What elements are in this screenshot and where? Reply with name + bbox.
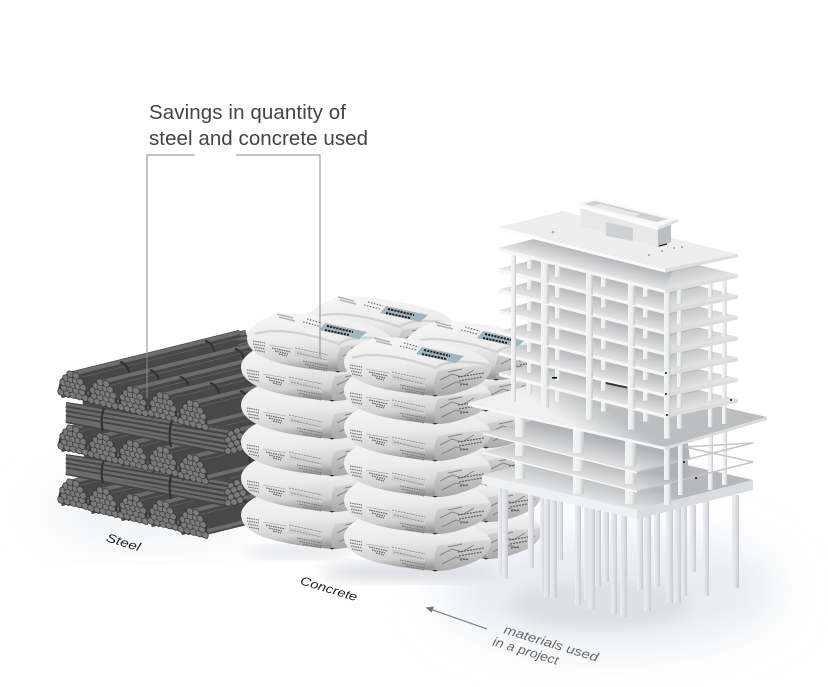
steel crossbar 2 xyxy=(66,454,246,508)
lower columns above base xyxy=(515,425,727,505)
steel layer 3 xyxy=(58,440,375,539)
dark slab markers xyxy=(552,372,732,479)
concrete bag stacks xyxy=(241,296,552,572)
steel backing fill xyxy=(82,333,256,530)
back right bag stack xyxy=(395,321,552,560)
middle open slab xyxy=(483,403,753,495)
title second line: steel and concrete used xyxy=(149,127,368,150)
label: materials used: materials used xyxy=(502,622,601,665)
front left bag stack xyxy=(241,313,394,550)
steel stack xyxy=(58,332,375,539)
steel layer 2 xyxy=(58,386,375,485)
foundation piles xyxy=(498,485,739,617)
large podium slab xyxy=(468,373,767,450)
thick base slab xyxy=(482,445,753,519)
label: steel: Steel xyxy=(105,530,143,554)
back left bag stack xyxy=(306,296,455,381)
arrow: materials direction xyxy=(426,606,487,629)
roof slab xyxy=(499,211,738,272)
leader line to concrete xyxy=(236,155,320,358)
typical floors xyxy=(499,232,738,439)
front right bag stack xyxy=(344,337,491,572)
steel layer 1 xyxy=(58,332,375,431)
title: Savings in quantity of xyxy=(149,101,346,124)
label: in a project: in a project xyxy=(491,634,561,668)
rooftop plant box xyxy=(576,199,678,247)
leader line to steel xyxy=(147,155,195,398)
building xyxy=(468,199,767,617)
label: concrete: Concrete xyxy=(299,573,360,604)
steel crossbar 1 xyxy=(66,402,246,456)
lower open slab xyxy=(483,422,753,492)
